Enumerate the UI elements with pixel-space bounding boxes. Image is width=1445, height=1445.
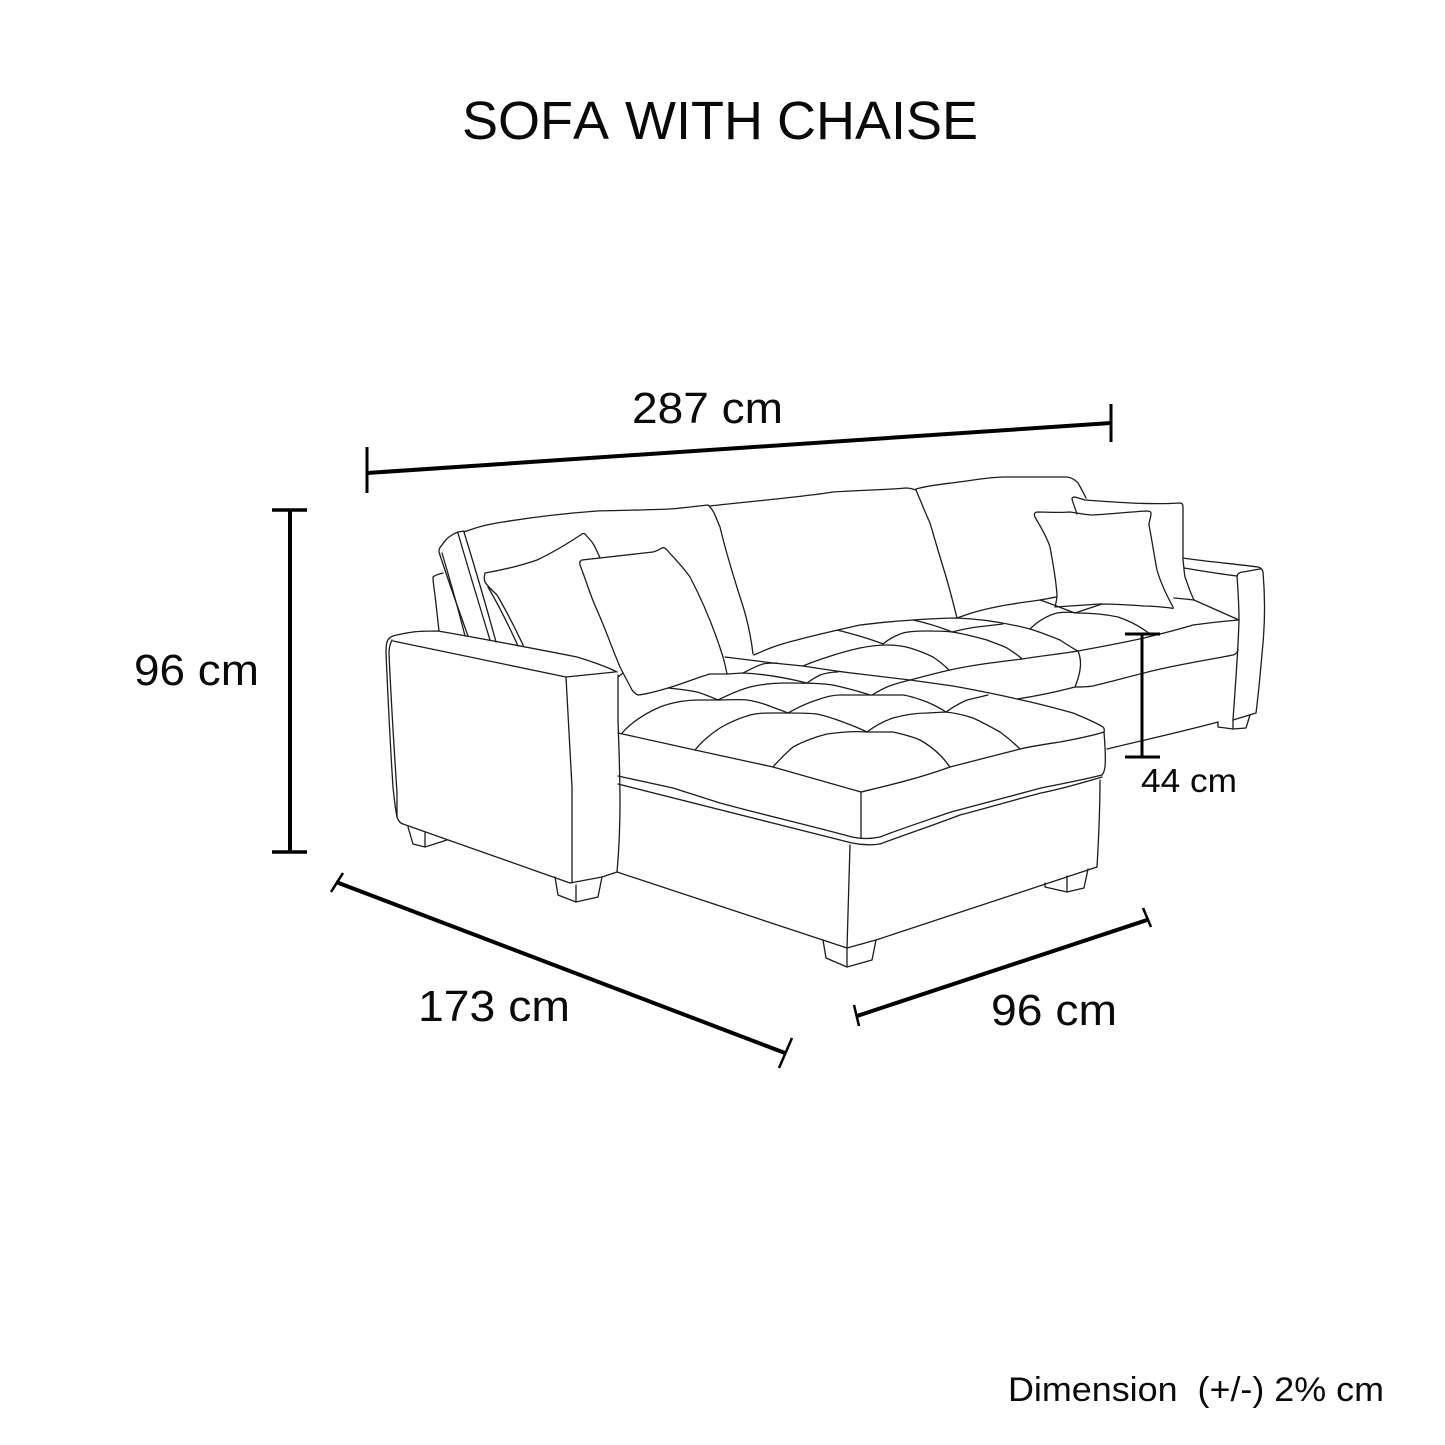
pillow back left bbox=[484, 534, 600, 647]
label: 287 cm: 287 cm bbox=[632, 384, 783, 433]
label: 44 cm: 44 cm bbox=[1141, 762, 1237, 799]
chaise base bbox=[617, 780, 1100, 948]
left legs bbox=[408, 827, 602, 902]
dimension: height line bbox=[272, 510, 307, 852]
dimension: overall width line bbox=[367, 404, 1111, 493]
label: 96 cm height: 96 cm bbox=[134, 646, 259, 695]
note: dimension tolerance: Dimension (+/-) 2% cm bbox=[1008, 1371, 1384, 1409]
label: 173 cm: 173 cm bbox=[418, 982, 570, 1031]
title: CHAISE bbox=[777, 91, 978, 151]
chaise cushion bbox=[618, 657, 1105, 845]
label: 96 cm width: 96 cm bbox=[991, 986, 1117, 1035]
right leg bbox=[1218, 715, 1250, 729]
right arm bbox=[1174, 558, 1264, 720]
pillow front left bbox=[580, 548, 727, 695]
sofa line drawing bbox=[386, 477, 1264, 967]
pillow front right bbox=[1034, 511, 1173, 608]
chaise legs bbox=[823, 869, 1088, 967]
back cushion middle bbox=[710, 488, 916, 506]
dimension: chaise width line bbox=[854, 908, 1151, 1026]
right seat cushion bbox=[754, 597, 1239, 749]
chaise tufting bbox=[622, 663, 1020, 767]
title: WITH bbox=[625, 91, 763, 151]
left arm bbox=[386, 631, 623, 883]
pillow back right bbox=[1072, 497, 1194, 600]
dimension: seat height line bbox=[1125, 634, 1160, 757]
back cushion left bbox=[433, 505, 753, 654]
title: SOFA bbox=[462, 91, 609, 151]
back cushion right bbox=[916, 477, 1086, 618]
dimension: chaise length line bbox=[331, 873, 792, 1068]
